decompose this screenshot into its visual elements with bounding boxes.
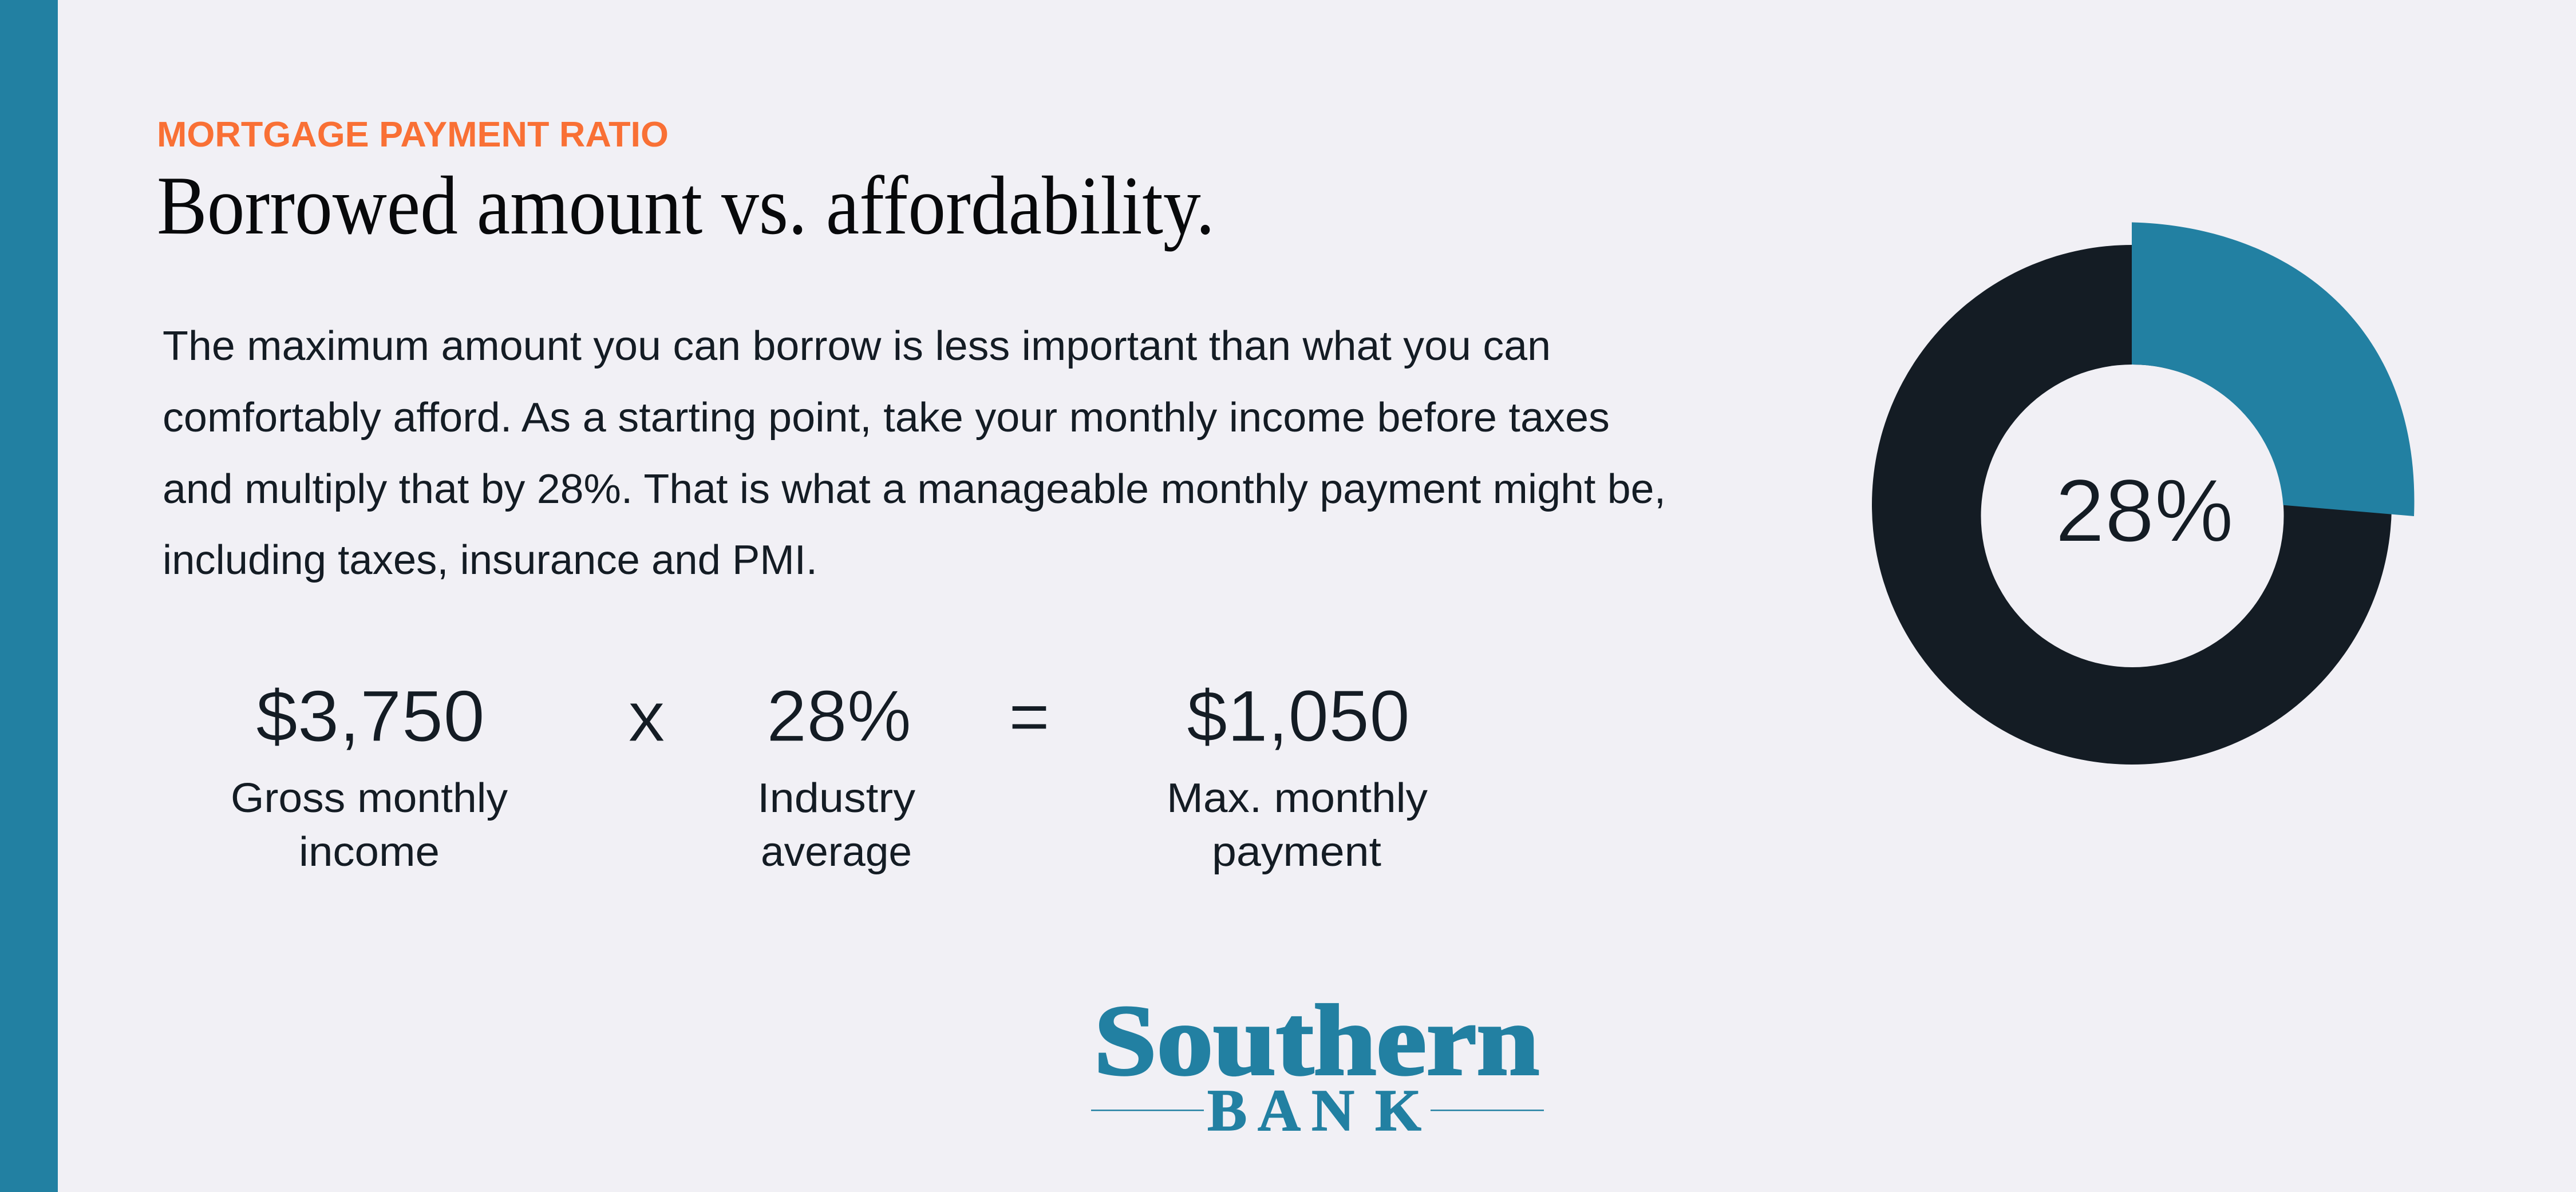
formula: gross monthly income: $3,750 (256, 675, 485, 757)
left accent bar (0, 0, 58, 1192)
Southern Bank logo: Southern (1094, 985, 1539, 1096)
title: Borrowed amount vs. affordability. (157, 159, 1215, 252)
formula: gross monthly income (231, 675, 508, 875)
donut: centre value: 28% (2055, 461, 2234, 561)
donut chart (1872, 222, 2415, 765)
formula: max monthly payment: $1,050 (1187, 675, 1410, 757)
formula row (231, 675, 1428, 875)
formula: max monthly payment: Max. monthly (1167, 775, 1428, 821)
body text block: comfortably afford. As a starting point, take your monthly income before taxes (163, 395, 1610, 441)
donut: 28% highlighted wedge (2132, 222, 2415, 516)
formula: gross monthly income: income (299, 829, 440, 875)
operator: multiply: x (628, 677, 665, 757)
Southern Bank logo: BANK (1207, 1078, 1421, 1143)
formula: max monthly payment: payment (1212, 829, 1381, 875)
Southern Bank logo (1091, 985, 1544, 1143)
formula: industry average: average (761, 829, 912, 875)
formula: industry average (757, 675, 915, 875)
formula: industry average: 28% (767, 675, 911, 757)
donut: centre hole (1981, 365, 2284, 667)
body text block (163, 323, 1666, 583)
operator: equals: = (1009, 677, 1050, 757)
formula: industry average: Industry (757, 775, 915, 821)
eyebrow heading: MORTGAGE PAYMENT RATIO (157, 115, 669, 155)
formula: max monthly payment (1167, 675, 1428, 875)
formula: gross monthly income: Gross monthly (231, 775, 508, 821)
body text block: including taxes, insurance and PMI. (163, 537, 817, 583)
body text block: and multiply that by 28%. That is what a manageable monthly payment might be, (163, 466, 1666, 512)
body text block: The maximum amount you can borrow is less important than what you can (163, 323, 1551, 369)
donut: remaining share (1872, 245, 2392, 765)
